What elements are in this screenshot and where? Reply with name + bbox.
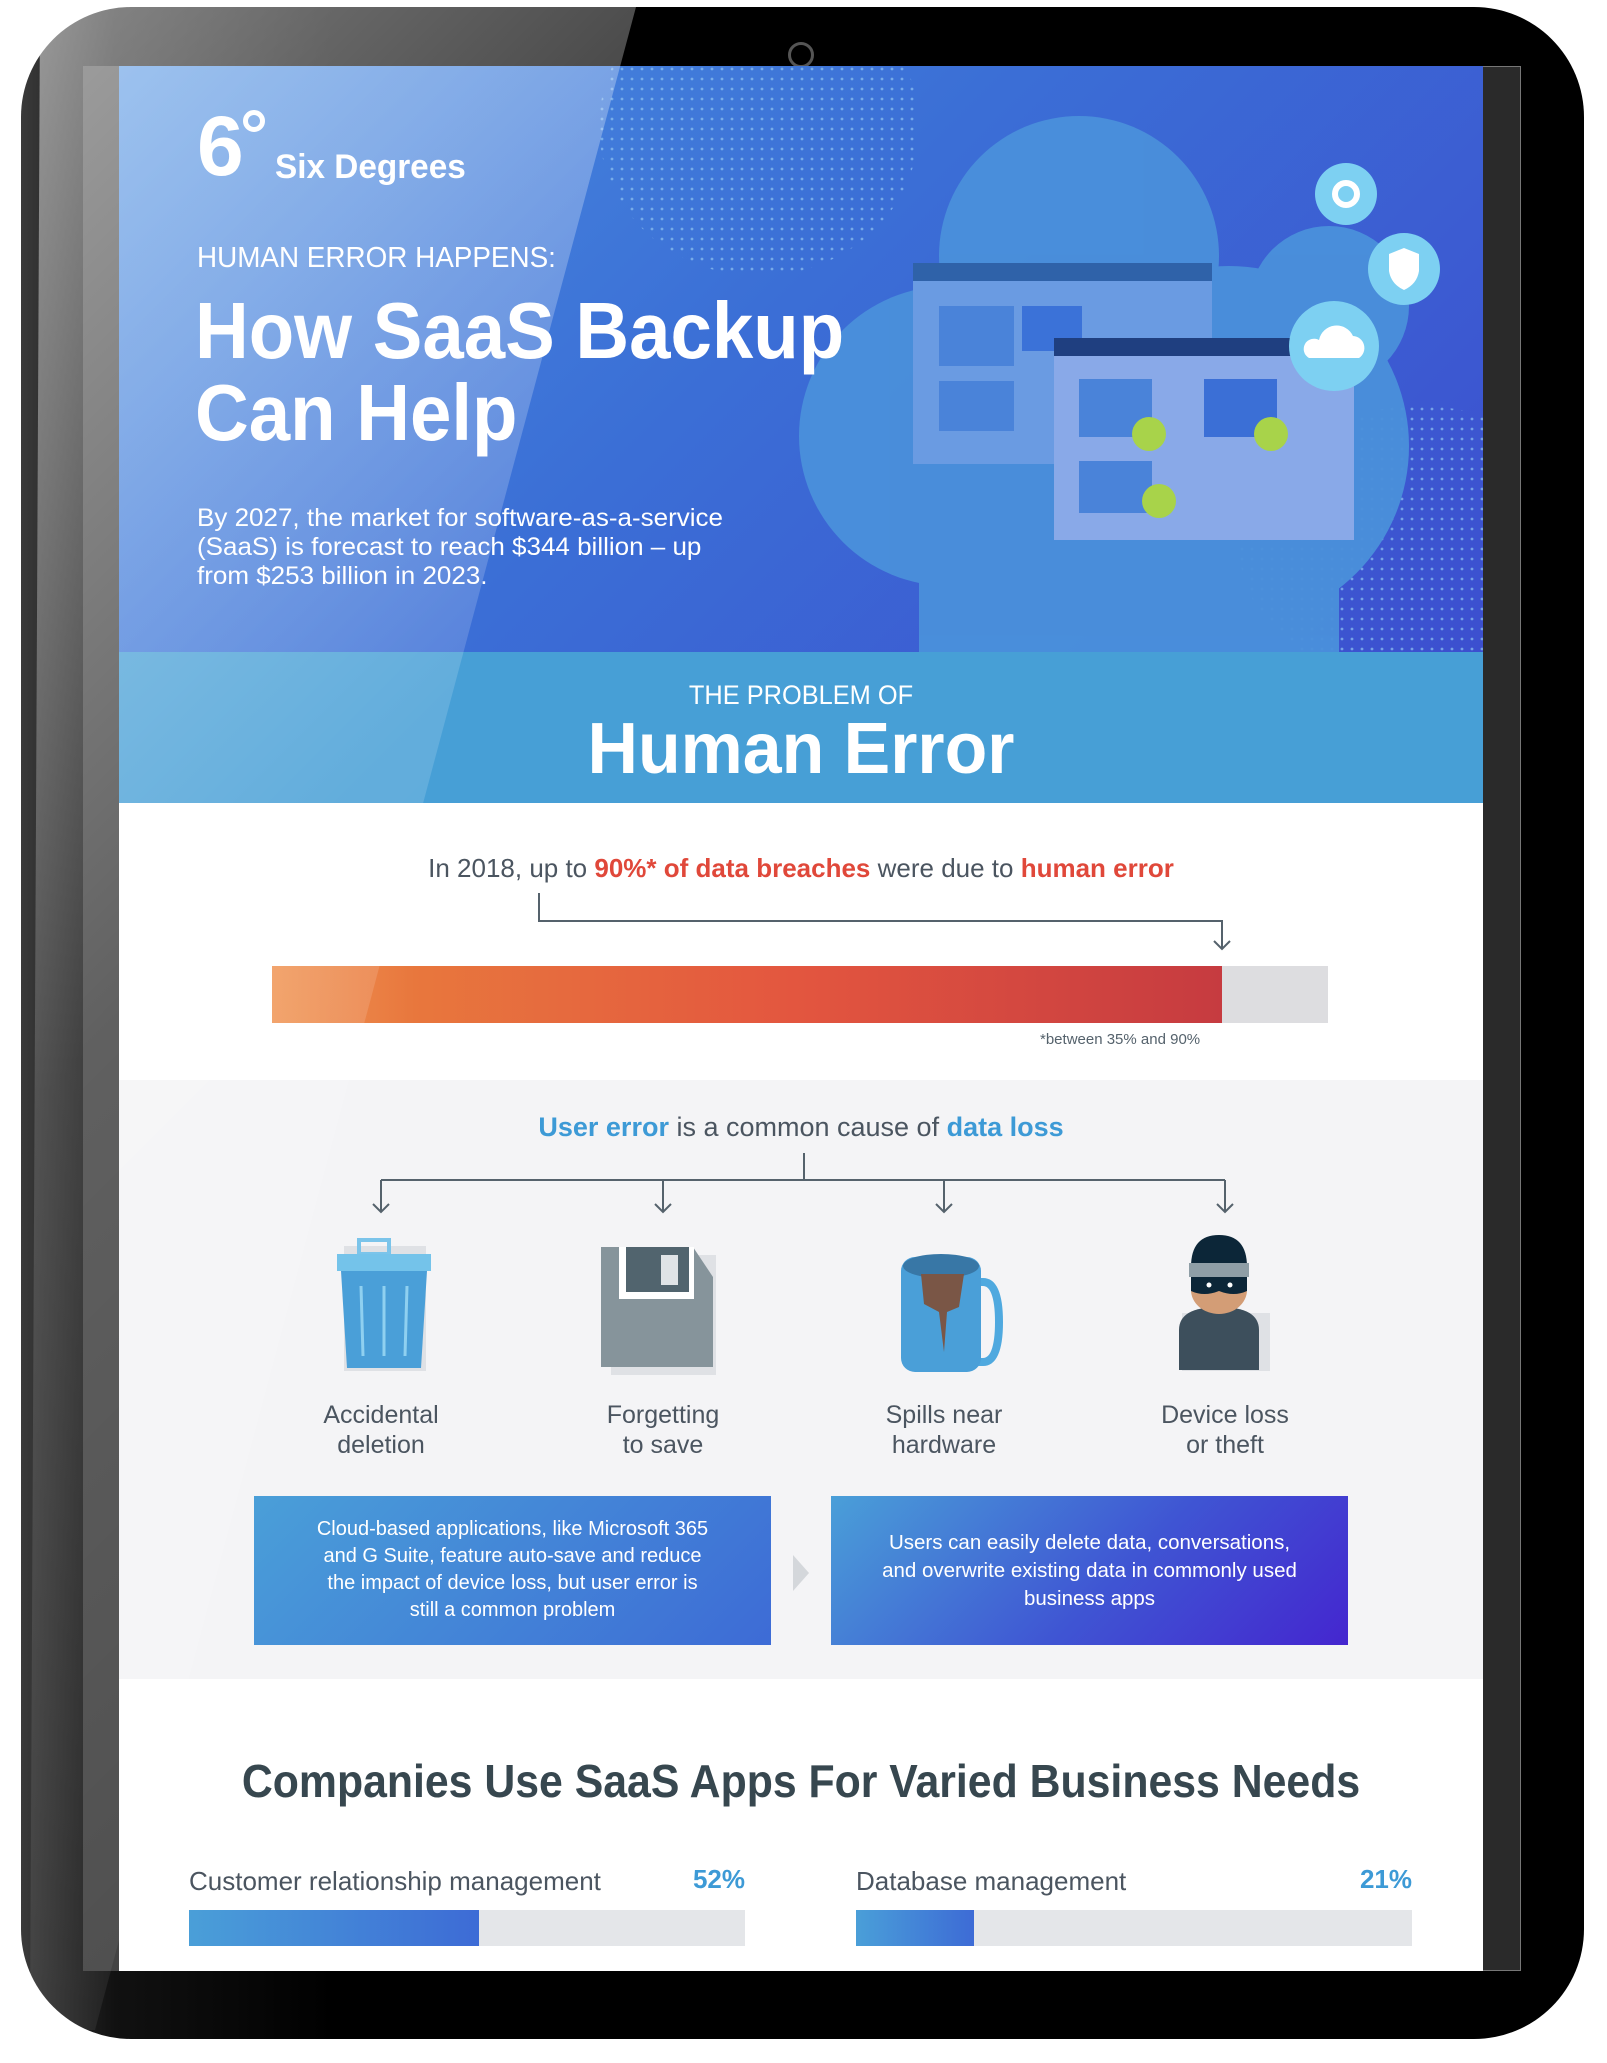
bar: database 21% bbox=[856, 1864, 1412, 1946]
label: forgetting to save: Forgetting bbox=[607, 1401, 719, 1429]
label: forgetting to save: to save bbox=[623, 1431, 703, 1459]
hero paragraph: (SaaS) is forecast to reach $344 billion – up bbox=[197, 533, 701, 561]
logo: Six Degrees bbox=[275, 148, 466, 186]
screen content bbox=[119, 66, 1483, 1971]
label: forgetting to save bbox=[607, 1401, 719, 1459]
bar: database 21%: 21% bbox=[1360, 1864, 1412, 1894]
hero bbox=[119, 66, 1483, 652]
band: the problem of human error: THE PROBLEM OF bbox=[689, 680, 913, 710]
cloud bbox=[799, 116, 1409, 652]
stat sentence: In 2018, up to 90%* of data breaches were due to human error bbox=[428, 853, 1174, 883]
bar: crm 52%: Customer relationship management bbox=[189, 1866, 601, 1896]
icon: trash can bbox=[337, 1238, 431, 1371]
bar: crm 52%: 52% bbox=[693, 1864, 745, 1894]
tree arrows bbox=[372, 1153, 1234, 1214]
icon: coffee mug bbox=[901, 1254, 1003, 1372]
icon: floppy disk bbox=[601, 1247, 716, 1375]
label: device loss or theft: Device loss bbox=[1161, 1401, 1289, 1429]
label: spills near hardware: hardware bbox=[892, 1431, 996, 1459]
hero paragraph bbox=[197, 504, 723, 590]
logo bbox=[197, 99, 466, 193]
label: spills near hardware: Spills near bbox=[886, 1401, 1002, 1429]
bar: crm 52% bbox=[189, 1864, 745, 1946]
hero paragraph: from $253 billion in 2023. bbox=[197, 562, 488, 590]
hero title: Can Help bbox=[195, 368, 517, 457]
saas needs heading: Companies Use SaaS Apps For Varied Business Needs bbox=[242, 1755, 1360, 1807]
front window bbox=[1054, 338, 1354, 540]
band: the problem of human error: Human Error bbox=[588, 709, 1014, 789]
footnote: *between 35% and 90% bbox=[1040, 1031, 1200, 1048]
gray causes section bbox=[119, 1080, 1483, 1679]
callout box left: Cloud-based applications, like Microsoft 365 bbox=[317, 1518, 708, 1540]
callout box left: still a common problem bbox=[410, 1599, 615, 1621]
callout box right: Users can easily delete data, conversations, bbox=[889, 1531, 1290, 1554]
callout box right: and overwrite existing data in commonly used bbox=[882, 1559, 1297, 1582]
callout box right bbox=[831, 1496, 1348, 1645]
label: device loss or theft: or theft bbox=[1186, 1431, 1264, 1459]
hero title bbox=[195, 286, 844, 457]
label: accidental deletion bbox=[323, 1401, 439, 1459]
callout box right: business apps bbox=[1024, 1587, 1155, 1610]
bar: database 21%: Database management bbox=[856, 1866, 1126, 1896]
causes heading: User error is a common cause of data loss bbox=[538, 1112, 1064, 1142]
band: the problem of human error bbox=[119, 652, 1483, 803]
camera bbox=[788, 42, 814, 68]
logo: 6 bbox=[197, 99, 244, 193]
kicker: HUMAN ERROR HAPPENS: bbox=[197, 242, 556, 274]
callout box left bbox=[254, 1496, 771, 1645]
icon circles bbox=[1315, 163, 1377, 225]
hero illustration bbox=[600, 68, 1483, 652]
hero title: How SaaS Backup bbox=[195, 286, 844, 375]
label: device loss or theft bbox=[1161, 1401, 1289, 1459]
hero paragraph: By 2027, the market for software-as-a-service bbox=[197, 504, 723, 532]
label: accidental deletion: deletion bbox=[337, 1431, 425, 1459]
callout box left: and G Suite, feature auto-save and reduce bbox=[323, 1545, 702, 1567]
arrow between callouts bbox=[793, 1555, 809, 1591]
bar chart: 90% bbox=[272, 966, 1328, 1023]
connector arrow bbox=[538, 893, 1231, 950]
stat section bbox=[119, 803, 1483, 1080]
back window bbox=[913, 263, 1212, 464]
label: spills near hardware bbox=[886, 1401, 1002, 1459]
icon: thief bbox=[1179, 1235, 1270, 1371]
callout box left: the impact of device loss, but user error is bbox=[327, 1572, 698, 1594]
label: accidental deletion: Accidental bbox=[323, 1401, 439, 1429]
